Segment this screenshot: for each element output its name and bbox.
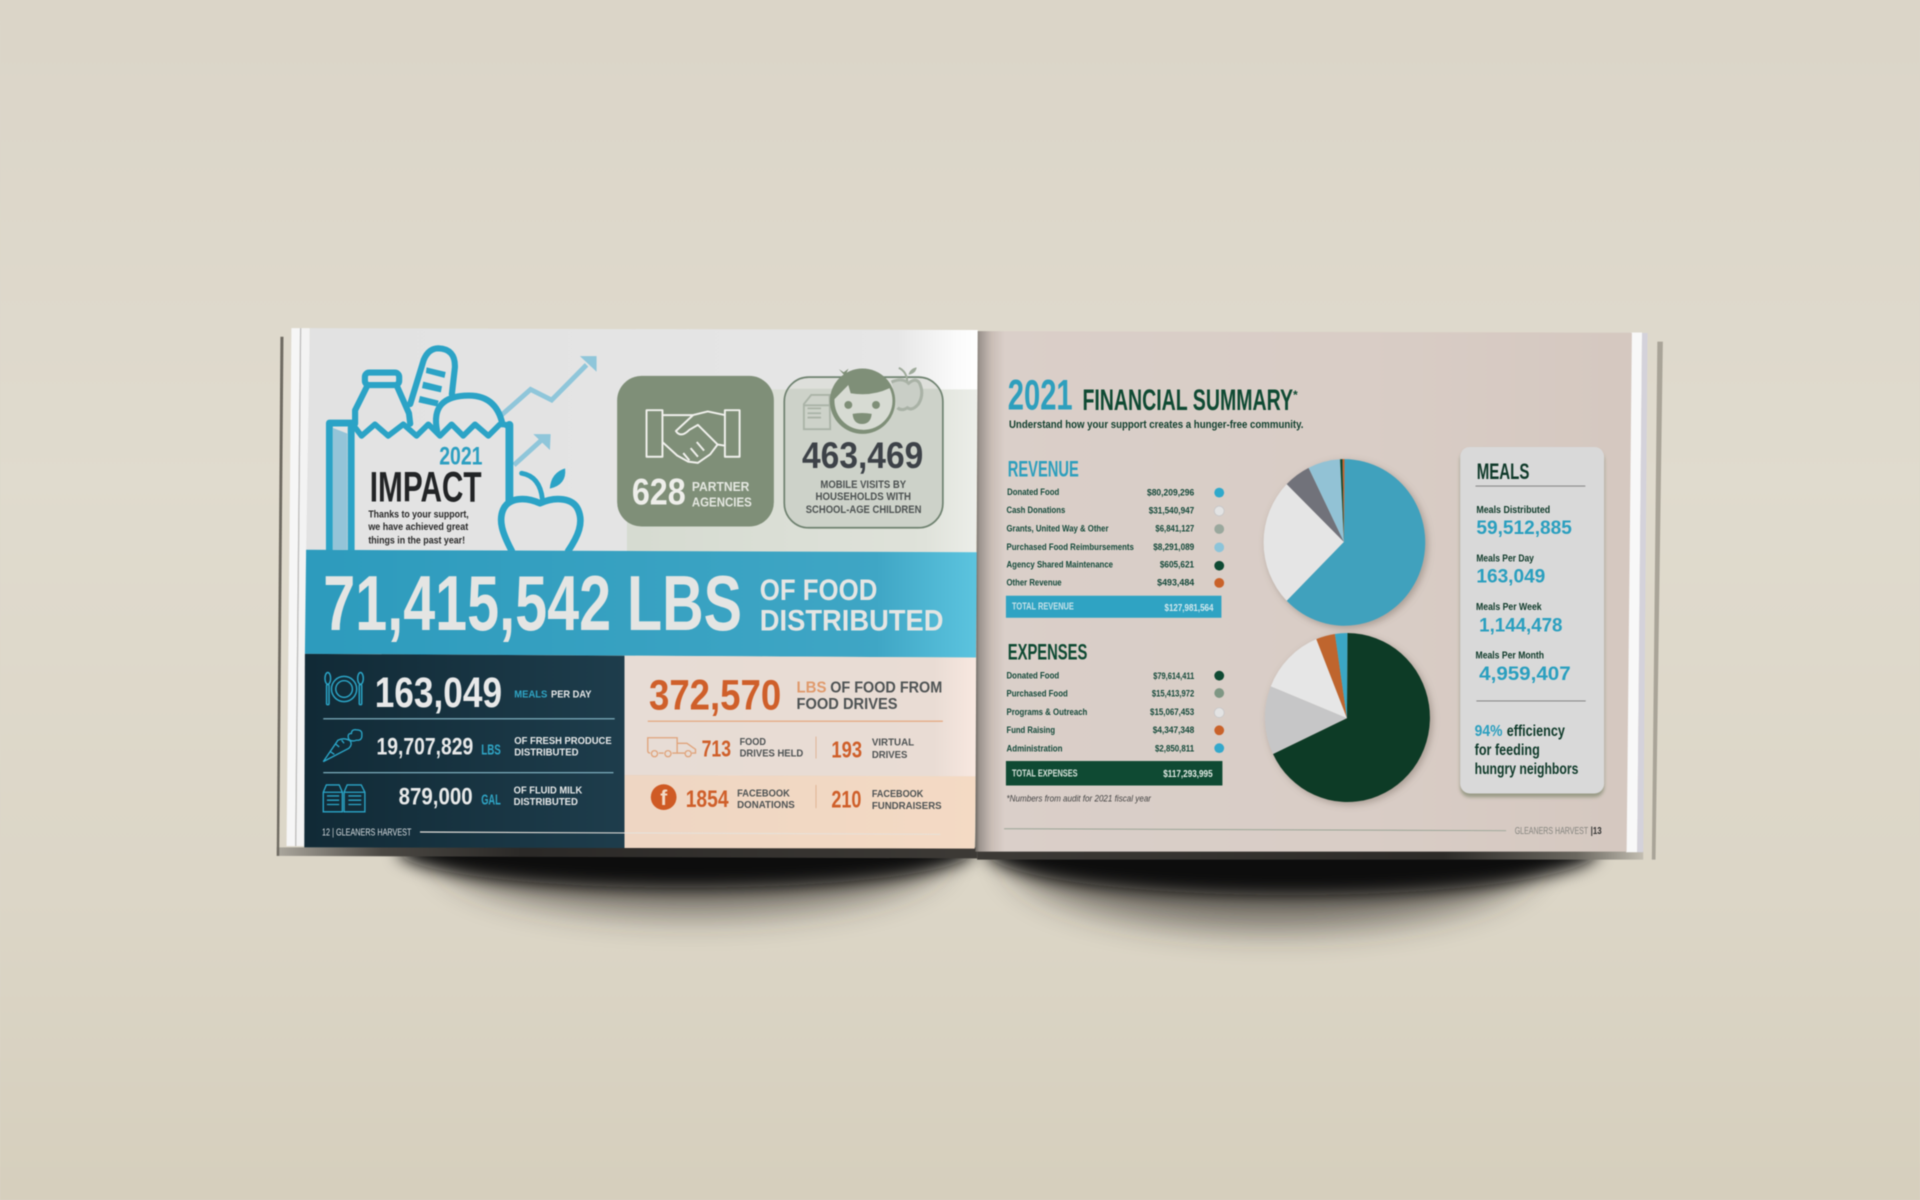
total expenses bar [1006, 761, 1222, 786]
right page footer: GLEANERS HARVEST [1515, 826, 1588, 837]
left page [304, 328, 978, 849]
revenue table: Other Revenue [1007, 578, 1062, 588]
panel: food drives [624, 656, 976, 776]
left page footer [322, 828, 940, 839]
sage panel [627, 389, 977, 553]
meals per month: Meals Per Month [1476, 650, 1544, 661]
impact intro text [367, 509, 469, 547]
revenue table: Grants, United Way & Other [1007, 523, 1109, 533]
panel: food drives: 372,570 [649, 672, 781, 720]
right page footer: |13 [1591, 826, 1602, 837]
right page [975, 331, 1632, 852]
panel: facebook: 1854 [686, 786, 729, 813]
fresh produce: 19,707,829 [377, 733, 473, 760]
panel: facebook: FUNDRAISERS [872, 801, 942, 812]
meals per week: 1,144,478 [1479, 615, 1563, 637]
expenses table [1007, 670, 1224, 754]
meals per day: 163,049 [375, 669, 502, 717]
panel: mobile visits: HOUSEHOLDS WITH [816, 491, 911, 503]
icon: rising arrows [502, 356, 597, 465]
fluid milk: DISTRIBUTED [514, 797, 578, 808]
icon: facebook: f [660, 787, 667, 810]
expenses table: Administration [1007, 743, 1063, 753]
title: * [1293, 388, 1298, 402]
panel: partner agencies: AGENCIES [692, 494, 752, 509]
panel: meals: MEALS [1477, 459, 1529, 484]
pie chart: revenue [1264, 459, 1425, 626]
icon: handshake [647, 410, 740, 463]
expenses table: Purchased Food [1007, 689, 1068, 699]
revenue table [1007, 487, 1224, 588]
expenses table: $79,614,411 [1153, 671, 1194, 681]
panel: food drives: DRIVES HELD [740, 749, 803, 760]
total revenue bar: $127,981,564 [1164, 603, 1214, 614]
efficiency callout: for feeding [1475, 742, 1540, 759]
revenue table: $6,841,127 [1155, 524, 1194, 534]
expenses table: Fund Raising [1007, 725, 1055, 735]
panel: distribution stats [304, 654, 624, 848]
panel: food drives: OF FOOD FROM [830, 680, 942, 697]
panel: mobile visits: 463,469 [802, 435, 923, 476]
book cover and page stack [277, 328, 1663, 860]
fresh produce: DISTRIBUTED [514, 748, 579, 759]
icon: facebook [651, 784, 677, 810]
meals per week: Meals Per Week [1476, 602, 1542, 613]
audit footnote: *Numbers from audit for 2021 fiscal year [1007, 793, 1152, 803]
right page footer [1004, 826, 1602, 837]
book shadow left [398, 791, 973, 913]
impact intro text: we have achieved great [367, 522, 469, 533]
panel: facebook: DONATIONS [737, 800, 795, 811]
meals per day: MEALS [514, 689, 547, 700]
panel: partner agencies: 628 [632, 471, 686, 512]
panel: mobile visits: SCHOOL-AGE CHILDREN [806, 504, 922, 516]
expenses table: $15,413,972 [1152, 689, 1194, 699]
icon: milk carton [804, 395, 830, 429]
revenue table: Donated Food [1007, 487, 1059, 497]
pie chart: expenses [1265, 633, 1430, 802]
subtitle: Understand how your support creates a hunger-free community. [1009, 419, 1303, 431]
panel: food drives: DRIVES [872, 750, 907, 761]
revenue table: $31,540,947 [1149, 505, 1194, 515]
expenses table: $15,067,453 [1150, 707, 1194, 717]
meals per day [1476, 554, 1545, 588]
revenue table: $80,209,296 [1147, 487, 1194, 497]
total expenses bar: $117,293,995 [1163, 769, 1213, 780]
efficiency callout: efficiency [1507, 723, 1565, 740]
meals per month [1476, 650, 1571, 685]
fresh produce: OF FRESH PRODUCE [514, 736, 612, 747]
fresh produce [377, 733, 612, 760]
impact heading: 2021 [439, 443, 482, 471]
expenses table: $4,347,348 [1153, 725, 1194, 735]
panel: headline band [305, 550, 977, 658]
meals distributed: Meals Distributed [1476, 505, 1550, 516]
page background [306, 328, 978, 553]
revenue table: $605,621 [1160, 560, 1194, 570]
total revenue bar [1006, 596, 1221, 618]
fluid milk: OF FLUID MILK [514, 785, 583, 796]
meals distributed: 59,512,885 [1476, 517, 1572, 539]
revenue table: $493,484 [1157, 578, 1195, 588]
efficiency callout: hungry neighbors [1475, 761, 1578, 778]
meals per day: 163,049 [1476, 566, 1545, 588]
title: FINANCIAL SUMMARY [1082, 384, 1293, 417]
panel: meals [1460, 447, 1604, 793]
panel: food drives: VIRTUAL [872, 738, 914, 749]
revenue table: Agency Shared Maintenance [1007, 560, 1113, 570]
revenue table: Cash Donations [1007, 505, 1065, 515]
left page footer: 12 | GLEANERS HARVEST [322, 828, 411, 839]
panel: mobile visits: MOBILE VISITS BY [820, 479, 906, 491]
title [1008, 372, 1298, 420]
impact intro text: things in the past year! [368, 536, 465, 547]
impact heading: IMPACT [370, 464, 482, 512]
revenue heading: REVENUE [1008, 456, 1079, 481]
panel: facebook: FACEBOOK [737, 789, 790, 800]
panel: headline band: DISTRIBUTED [760, 605, 943, 638]
panel: partner agencies [617, 376, 774, 527]
fluid milk: 879,000 [399, 783, 473, 810]
panel: food drives: 193 [831, 736, 862, 762]
meals per month: 4,959,407 [1479, 663, 1571, 685]
total expenses bar: TOTAL EXPENSES [1012, 768, 1078, 779]
page background [975, 331, 1632, 852]
icon: plate and cutlery [325, 672, 363, 705]
panel: facebook [624, 775, 976, 849]
icon: child face [830, 368, 895, 434]
icon: grocery bag [329, 348, 580, 551]
impact intro text: Thanks to your support, [368, 509, 469, 520]
fluid milk: GAL [481, 792, 501, 808]
expenses table: $2,850,811 [1155, 744, 1194, 754]
panel: mobile visits [784, 367, 943, 528]
icon: truck [648, 738, 696, 757]
panel: facebook: FACEBOOK [872, 789, 924, 800]
panel: food drives: 713 [702, 736, 731, 762]
panel: food drives: FOOD DRIVES [797, 696, 898, 713]
panel: food drives: LBS [797, 680, 827, 697]
icon: apple [891, 367, 922, 410]
icon: carrot [323, 730, 362, 762]
panel: partner agencies: PARTNER [692, 479, 750, 494]
efficiency callout: 94% [1475, 723, 1503, 740]
expenses table: Programs & Outreach [1007, 707, 1088, 717]
expenses heading: EXPENSES [1008, 639, 1087, 664]
efficiency callout [1475, 723, 1578, 778]
icon: milk cartons [323, 785, 365, 812]
panel: facebook: 210 [831, 787, 861, 814]
book shadow right [986, 781, 1598, 928]
panel: headline band: 71,415,542 LBS [323, 559, 742, 647]
revenue table: Purchased Food Reimbursements [1007, 542, 1134, 552]
meals per day: Meals Per Day [1476, 554, 1534, 565]
meals per day: PER DAY [551, 689, 592, 700]
panel: headline band: OF FOOD [760, 574, 877, 607]
meals per week [1476, 602, 1563, 637]
title: 2021 [1008, 372, 1073, 420]
revenue table: $8,291,089 [1153, 542, 1194, 552]
total revenue bar: TOTAL REVENUE [1012, 602, 1074, 613]
fluid milk [399, 783, 583, 810]
fresh produce: LBS [481, 742, 501, 758]
expenses table: Donated Food [1007, 670, 1059, 680]
impact heading [370, 443, 482, 512]
meals distributed [1476, 505, 1572, 539]
panel: food drives: FOOD [740, 737, 766, 748]
